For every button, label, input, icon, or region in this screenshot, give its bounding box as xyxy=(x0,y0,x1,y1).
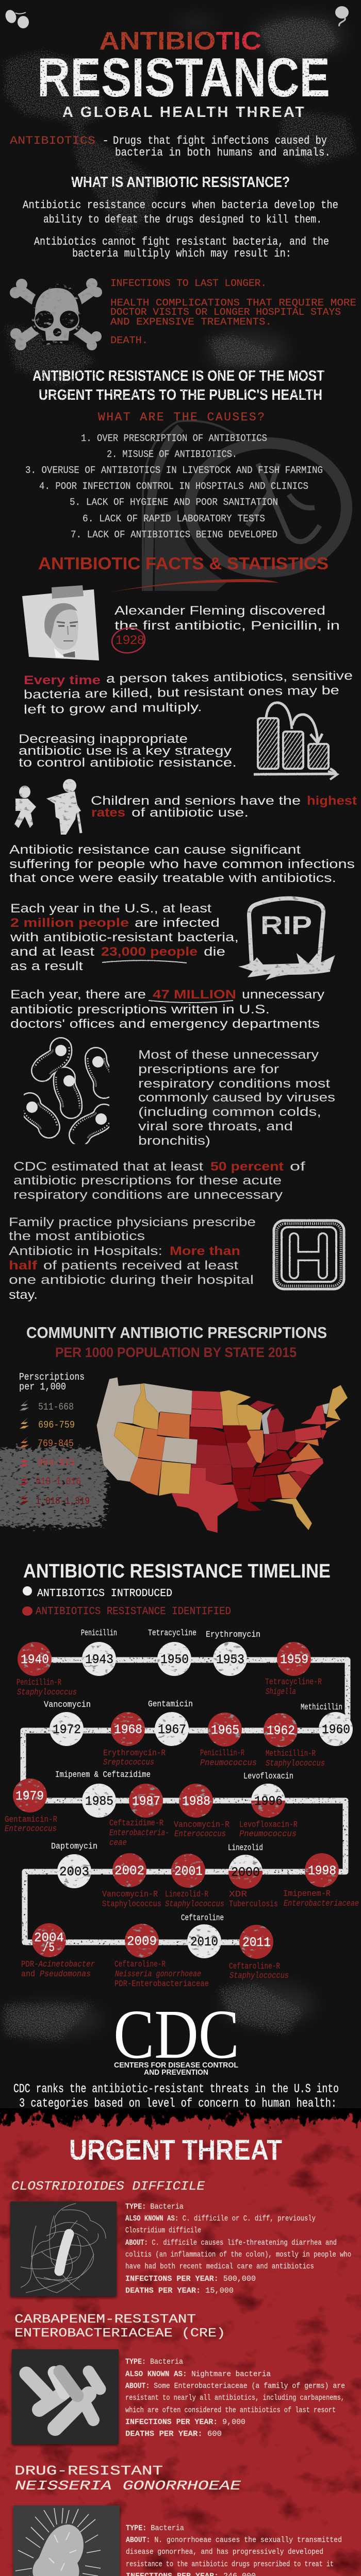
list: causes: 7. LACK OF ANTIBIOTICS BEING DEVELOPED xyxy=(71,529,277,540)
panel: Clostridioides difficile xyxy=(10,2180,351,2296)
text: every time: left to grow and multiply. xyxy=(24,700,202,717)
legend: prescriptions per 1,000: per 1,000 xyxy=(19,1381,66,1393)
list: causes: 6. LACK OF RAPID LABORATORY TESTS xyxy=(83,513,265,524)
timeline year labels: 2003 xyxy=(59,1865,89,1879)
text: decreasing use: to control antibiotic resistance. xyxy=(19,756,237,770)
text: family practice and hospitals: of patients received at least xyxy=(43,1259,238,1273)
timeline year labels: 1950 xyxy=(160,1652,189,1667)
logo: CDC: CDC xyxy=(113,1996,239,2073)
facts: N. gonorrhoeae: disease gonorrhea, and has progressively developed xyxy=(126,2548,323,2556)
timeline antibiotic names: Imipenem & Ceftazidime xyxy=(55,1770,151,1780)
timeline year labels: 2010 xyxy=(190,1935,218,1950)
image: CRE bacteria xyxy=(12,2349,119,2444)
text: 47 million prescriptions: antibiotic prescriptions written in U.S. xyxy=(10,1003,270,1016)
timeline antibiotic names: Tetracycline xyxy=(148,1629,196,1638)
text: family practice and hospitals: half xyxy=(9,1259,38,1273)
heading: timeline: ANTIBIOTIC RESISTANCE TIMELINE xyxy=(23,1561,331,1582)
text: 50 percent unnecessary: 50 percent xyxy=(210,1160,284,1174)
logo: CDC: AND PREVENTION xyxy=(144,2068,208,2077)
text: decreasing use: Decreasing inappropriate xyxy=(19,732,188,746)
timeline path xyxy=(23,1660,348,1942)
timeline antibiotic names: Linezolid xyxy=(228,1843,263,1853)
timeline year labels xyxy=(15,1652,350,1955)
timeline antibiotic names: Daptomycin xyxy=(51,1842,97,1852)
text: children and seniors xyxy=(91,794,357,820)
decorative swoosh under heading xyxy=(111,579,278,592)
facts: C. difficile: INFECTIONS PER YEAR: 500,000 xyxy=(125,2275,256,2283)
text: children and seniors: Children and seniors have the xyxy=(91,794,301,808)
facts: C. difficile: TYPE: Bacteria xyxy=(125,2202,184,2211)
legend: timeline: ANTIBIOTICS RESISTANCE IDENTIFIED xyxy=(36,1606,231,1618)
facts: C. difficile: Clostridium difficile xyxy=(125,2226,201,2235)
text: 2 million infected: and at least xyxy=(10,945,94,959)
timeline antibiotic names: Methicillin xyxy=(301,1703,342,1713)
legend: prescriptions per 1,000 xyxy=(19,1371,90,1507)
facts: C. difficile: ALSO KNOWN AS: C. difficile or C. diff, previously xyxy=(125,2214,316,2223)
timeline resistance labels: Staphylococcus xyxy=(17,1688,77,1698)
timeline resistance labels: Staphylococcus xyxy=(165,1900,224,1909)
timeline antibiotic names: Levofloxacin xyxy=(243,1772,293,1782)
facts: N. gonorrhoeae xyxy=(126,2524,342,2576)
facts: CRE: DEATHS PER YEAR: 600 xyxy=(125,2430,222,2438)
text: Fleming discovery: Alexander Fleming discovered xyxy=(114,604,325,618)
definition of antibiotics xyxy=(10,134,331,159)
timeline year labels: 1988 xyxy=(182,1794,210,1809)
timeline resistance labels: Staphylococcus xyxy=(229,1971,289,1981)
heading: community prescriptions xyxy=(26,1324,327,1360)
text: 50 percent unnecessary: CDC estimated that at least xyxy=(13,1160,203,1174)
timeline year labels: 1972 xyxy=(53,1722,81,1737)
panel: drug-resistant Neisseria gonorrhoeae xyxy=(13,2463,342,2576)
heading: what is antibiotic resistance: WHAT IS ANTIBIOTIC RESISTANCE? xyxy=(71,174,290,191)
text: 2 million infected: die xyxy=(204,945,225,959)
text: significant suffering: Antibiotic resistance can cause significant xyxy=(9,843,301,857)
timeline resistance labels: Pneumococcus xyxy=(200,1758,257,1768)
legend: prescriptions per 1,000: 769-845 xyxy=(38,1438,74,1449)
heading: what are the causes: WHAT ARE THE CAUSES? xyxy=(98,411,265,424)
list: causes: 5. LACK OF HYGIENE AND POOR SANITATION xyxy=(70,497,278,508)
panel: carbapenem-resistant Enterobacteriaceae: CARBAPENEM-RESISTANT xyxy=(14,2313,196,2327)
timeline year labels: 1959 xyxy=(280,1652,308,1667)
legend: prescriptions per 1,000: 918-1,016 xyxy=(36,1476,81,1487)
text: every time: bacteria are killed, but resistant ones may be xyxy=(24,683,339,702)
text block: explanation of resistance: bacteria multiply which may result in: xyxy=(72,247,291,260)
timeline resistance labels: Ceftaroline-R xyxy=(229,1962,280,1972)
text: respiratory conditions: commonly caused by viruses xyxy=(138,1091,335,1105)
heading: community prescriptions: COMMUNITY ANTIBIOTIC PRESCRIPTIONS xyxy=(26,1324,327,1342)
text: children and seniors: highest xyxy=(307,794,357,808)
timeline year labels: 1943 xyxy=(85,1652,113,1667)
text: every time: Every time xyxy=(24,673,101,687)
facts: CRE: INFECTIONS PER YEAR: 9,000 xyxy=(125,2418,245,2427)
panel: carbapenem-resistant Enterobacteriaceae: ENTEROBACTERIACEAE (CRE) xyxy=(14,2327,225,2341)
timeline year labels: 2001 xyxy=(174,1864,203,1879)
definition of antibiotics: ANTIBIOTICS xyxy=(10,134,95,147)
timeline year labels: 1985 xyxy=(85,1794,113,1809)
facts: C. difficile xyxy=(125,2202,351,2295)
timeline resistance labels: XDR xyxy=(229,1890,247,1900)
text: family practice and hospitals: one antibiotic during their hospital xyxy=(9,1273,254,1287)
timeline resistance labels: Tuberculosis xyxy=(229,1900,278,1909)
timeline antibiotic names: Ceftaroline xyxy=(181,1913,224,1923)
icon: RIP tombstone: RIP xyxy=(260,911,312,940)
panel: carbapenem-resistant Enterobacteriaceae xyxy=(12,2313,345,2444)
text: 2 million infected: are infected xyxy=(135,916,220,930)
icon: pills top left xyxy=(4,8,29,28)
list: causes: 3. OVERUSE OF ANTIBIOTICS IN LIVESTOCK AND FISH FARMING xyxy=(25,465,323,476)
definition of antibiotics: bacteria in both humans and animals. xyxy=(115,146,331,159)
title: ANTIBIO TIC xyxy=(99,27,261,55)
timeline resistance labels: Pneumococcus xyxy=(239,1829,297,1839)
text: children and seniors: of antibiotic use. xyxy=(132,806,249,820)
legend: prescriptions per 1,000: 696-759 xyxy=(38,1419,75,1431)
timeline year labels: 1953 xyxy=(216,1652,244,1667)
timeline resistance labels: Penicillin-R xyxy=(17,1678,61,1688)
text: family practice and hospitals: the most antibiotics xyxy=(9,1229,145,1243)
icon: faint bacteria watermark xyxy=(143,421,347,591)
text: children and seniors: rates xyxy=(91,806,125,820)
timeline year labels: 2009 xyxy=(127,1934,157,1949)
timeline resistance labels: Sreptococcus xyxy=(103,1758,154,1768)
text: 2 million infected: 23,000 people xyxy=(101,945,198,959)
text block: consequences: INFECTIONS TO LAST LONGER. xyxy=(110,278,267,289)
text: Fleming discovery xyxy=(114,604,340,647)
panel: Clostridioides difficile: CLOSTRIDIOIDES DIFFICILE xyxy=(11,2180,205,2194)
timeline nodes: red resistance xyxy=(13,1642,339,1959)
timeline resistance labels: Vancomycin-R xyxy=(102,1890,158,1900)
text: 2 million infected: as a result xyxy=(10,959,83,973)
heading: most urgent threats xyxy=(32,368,324,403)
timeline year labels: 2011 xyxy=(242,1935,271,1950)
text: 2 million infected: 2 million people xyxy=(10,916,129,930)
timeline resistance labels: Imipenem-R xyxy=(283,1889,331,1899)
text: respiratory conditions: respiratory conditions most xyxy=(138,1077,330,1091)
heading: urgent threat: URGENT THREAT xyxy=(69,2133,282,2166)
timeline resistance labels: Enterococcus xyxy=(5,1824,57,1834)
text: family practice and hospitals: Family practice physicians prescribe xyxy=(9,1215,256,1229)
text: 47 million prescriptions xyxy=(10,988,324,1031)
text: respiratory conditions: Most of these unnecessary xyxy=(138,1048,319,1062)
timeline resistance labels: Erythromycin-R xyxy=(103,1749,166,1758)
timeline nodes: white introduced xyxy=(50,1642,353,1958)
image: N. gonorrhoeae bacterium xyxy=(13,2505,120,2576)
panel: drug-resistant Neisseria gonorrhoeae: NEISSERIA GONORRHOEAE xyxy=(15,2478,241,2494)
heading: community prescriptions: PER 1000 POPULATION BY STATE 2015 xyxy=(55,1345,297,1360)
icon: child and senior xyxy=(14,779,81,835)
timeline antibiotic names: Gentamicin xyxy=(148,1700,193,1709)
facts: CRE: TYPE: Bacteria xyxy=(125,2358,183,2366)
text: 2 million infected: Each year in the U.S., at least xyxy=(10,902,211,916)
image: C. difficile bacterium xyxy=(10,2201,117,2296)
title xyxy=(37,27,330,121)
timeline year labels: 1996 xyxy=(254,1794,283,1809)
text: every time: a person takes antibiotics, sensitive xyxy=(106,669,353,686)
timeline resistance labels: Vancomycin-R xyxy=(174,1820,229,1830)
timeline resistance labels: Neisseria gonorrhoeae xyxy=(115,1970,201,1979)
timeline resistance labels: Ceftazidime-R xyxy=(109,1819,163,1828)
timeline antibiotic names: Vancomycin xyxy=(44,1700,91,1710)
timeline resistance labels: ceae xyxy=(109,1838,127,1848)
timeline resistance labels: Levofloxacin-R xyxy=(239,1820,298,1830)
text: 50 percent unnecessary xyxy=(13,1160,305,1202)
timeline year labels: 1962 xyxy=(267,1723,295,1738)
text: 50 percent unnecessary: of xyxy=(290,1160,305,1174)
text block: consequences: HEALTH COMPLICATIONS THAT REQUIRE MORE xyxy=(110,297,356,309)
text: every time xyxy=(24,669,353,717)
facts: N. gonorrhoeae: TYPE: Bacteria xyxy=(126,2524,184,2533)
text: respiratory conditions: (including common colds, xyxy=(138,1105,321,1119)
timeline resistance labels xyxy=(5,1677,359,1989)
text: respiratory conditions: viral sore throats, and xyxy=(138,1120,293,1133)
text block: consequences: DEATH. xyxy=(110,335,148,346)
heading: antibiotic facts and statistics: ANTIBIOTIC FACTS & STATISTICS xyxy=(38,554,329,573)
background: red threat section with torn edges xyxy=(0,2108,361,2576)
definition of antibiotics: Drugs that fight infections caused by xyxy=(113,134,327,147)
timeline year labels: 1998 xyxy=(308,1863,336,1878)
text: 47 million prescriptions: doctors' offices and emergency departments xyxy=(10,1017,320,1031)
icon: bacterium top right xyxy=(335,6,349,26)
text: family practice and hospitals xyxy=(9,1215,256,1302)
text: family practice and hospitals: Antibiotic in Hospitals: xyxy=(9,1244,162,1258)
text: respiratory conditions: prescriptions are for xyxy=(138,1062,279,1076)
list: causes xyxy=(25,433,323,540)
timeline year labels: 1940 xyxy=(21,1652,49,1667)
icon: RIP tombstone xyxy=(238,899,335,980)
text block: consequences xyxy=(110,278,356,346)
timeline resistance labels: Staphylococcus xyxy=(102,1900,161,1909)
text block: consequences: AND EXPENSIVE TREATMENTS. xyxy=(110,316,272,328)
timeline year labels: 1979 xyxy=(15,1789,44,1804)
text: respiratory conditions: bronchitis) xyxy=(138,1134,210,1148)
panel: drug-resistant Neisseria gonorrhoeae: DRUG-RESISTANT xyxy=(14,2463,163,2479)
circled year xyxy=(110,626,146,655)
timeline year labels: 1965 xyxy=(211,1723,239,1738)
legend: timeline: ANTIBIOTICS INTRODUCED xyxy=(37,1588,172,1600)
timeline resistance labels: Shigella xyxy=(266,1687,296,1697)
timeline resistance labels: Ceftaroline-R xyxy=(114,1960,166,1970)
text: decreasing use xyxy=(19,732,237,770)
icon: decreasing bars xyxy=(254,703,337,779)
text: significant suffering xyxy=(9,843,355,885)
timeline resistance labels: and Pseudomonas xyxy=(21,1970,91,1979)
text: 2 million infected: with antibiotic-resistant bacteria, xyxy=(10,930,239,944)
legend: timeline xyxy=(22,1586,231,1618)
text: 50 percent unnecessary: respiratory conditions are unnecessary xyxy=(13,1188,283,1202)
timeline resistance labels: Linezolid-R xyxy=(165,1890,208,1900)
list: causes: 2. MISUSE OF ANTIBIOTICS. xyxy=(107,449,237,460)
timeline year labels: 1968 xyxy=(114,1722,142,1737)
text: significant suffering: suffering for people who have common infections xyxy=(9,857,355,871)
timeline year labels: 2002 xyxy=(114,1863,144,1878)
list: causes: 4. POOR INFECTION CONTROL IN HOSPITALS AND CLINICS xyxy=(39,481,308,492)
icon: hospital sign xyxy=(274,1221,344,1289)
icon: skull and crossbones xyxy=(10,278,102,350)
legend: prescriptions per 1,000: 511-668 xyxy=(38,1401,74,1413)
text: 47 million prescriptions: Each year, there are xyxy=(10,988,146,1002)
photo: Alexander Fleming note xyxy=(22,585,99,660)
timeline year labels: /5 xyxy=(43,1940,55,1955)
timeline resistance labels: PDR-Enterobacteriaceae xyxy=(114,1979,209,1989)
facts: CRE: ALSO KNOWN AS: Nightmare bacteria xyxy=(125,2370,271,2379)
timeline year labels: 1967 xyxy=(158,1722,186,1737)
facts: C. difficile: have had both recent medical care and antibiotics xyxy=(125,2262,314,2271)
choropleth map of US states xyxy=(96,1377,348,1533)
legend: prescriptions per 1,000: 1,018-1,319 xyxy=(36,1496,90,1507)
timeline resistance labels: Enterococcus xyxy=(174,1829,226,1839)
decorative chalk smear xyxy=(0,1449,106,1526)
text: Fleming discovery: 1928 xyxy=(116,633,144,647)
text block: consequences: DOCTOR VISITS OR LONGER HOSPITAL STAYS xyxy=(110,307,341,318)
logo: CDC: CENTERS FOR DISEASE CONTROL xyxy=(114,2061,238,2070)
timeline year labels: 1960 xyxy=(322,1722,350,1737)
text block: explanation of resistance xyxy=(23,199,338,260)
timeline resistance labels: Gentamicin-R xyxy=(5,1815,57,1825)
facts: CRE xyxy=(125,2358,345,2438)
timeline resistance labels: Methicillin-R xyxy=(266,1749,316,1759)
text: 50 percent unnecessary: antibiotic prescriptions for these acute xyxy=(13,1174,282,1188)
text: Fleming discovery: the first antibiotic, Penicillin, in xyxy=(114,619,340,633)
icon: five bacteria xyxy=(26,1045,107,1135)
timeline year labels: 2000 xyxy=(231,1865,260,1880)
text: 47 million prescriptions: 47 MILLION xyxy=(153,988,236,1002)
title: A GLOBAL HEALTH THREAT xyxy=(62,104,304,121)
timeline resistance labels: Penicillin-R xyxy=(200,1749,244,1758)
text: CDC ranking intro xyxy=(13,2082,339,2111)
legend: prescriptions per 1,000: Perscriptions xyxy=(19,1371,85,1383)
text: family practice and hospitals: stay. xyxy=(9,1288,38,1302)
text: 2 million infected xyxy=(10,902,239,973)
timeline year labels: 1987 xyxy=(132,1794,160,1809)
timeline antibiotic names: Penicillin xyxy=(81,1629,117,1638)
facts: C. difficile: DEATHS PER YEAR: 15,000 xyxy=(125,2286,234,2295)
timeline resistance labels: Staphylococcus xyxy=(266,1759,325,1769)
timeline antibiotic names: Erythromycin xyxy=(206,1630,260,1640)
timeline resistance labels: Enterobacteria- xyxy=(109,1828,169,1838)
text: 47 million prescriptions: unnecessary xyxy=(242,988,324,1002)
timeline year labels: 2004 xyxy=(34,1930,64,1945)
list: causes: 1. OVER PRESCRIPTION OF ANTIBIOTICS xyxy=(81,433,267,444)
timeline resistance labels: PDR-Acinetobacter xyxy=(21,1960,95,1970)
timeline antibiotic names xyxy=(44,1629,342,1923)
definition of antibiotics: - xyxy=(102,134,109,147)
legend: prescriptions per 1,000: 864-915 xyxy=(38,1457,75,1468)
text: family practice and hospitals: More than xyxy=(170,1244,240,1258)
timeline resistance labels: Tetracycline-R xyxy=(265,1677,322,1687)
text: significant suffering: that once were easily treatable with antibiotics. xyxy=(9,871,336,885)
text: decreasing use: antibiotic use is a key strategy xyxy=(19,744,232,758)
text: respiratory conditions xyxy=(138,1048,335,1148)
